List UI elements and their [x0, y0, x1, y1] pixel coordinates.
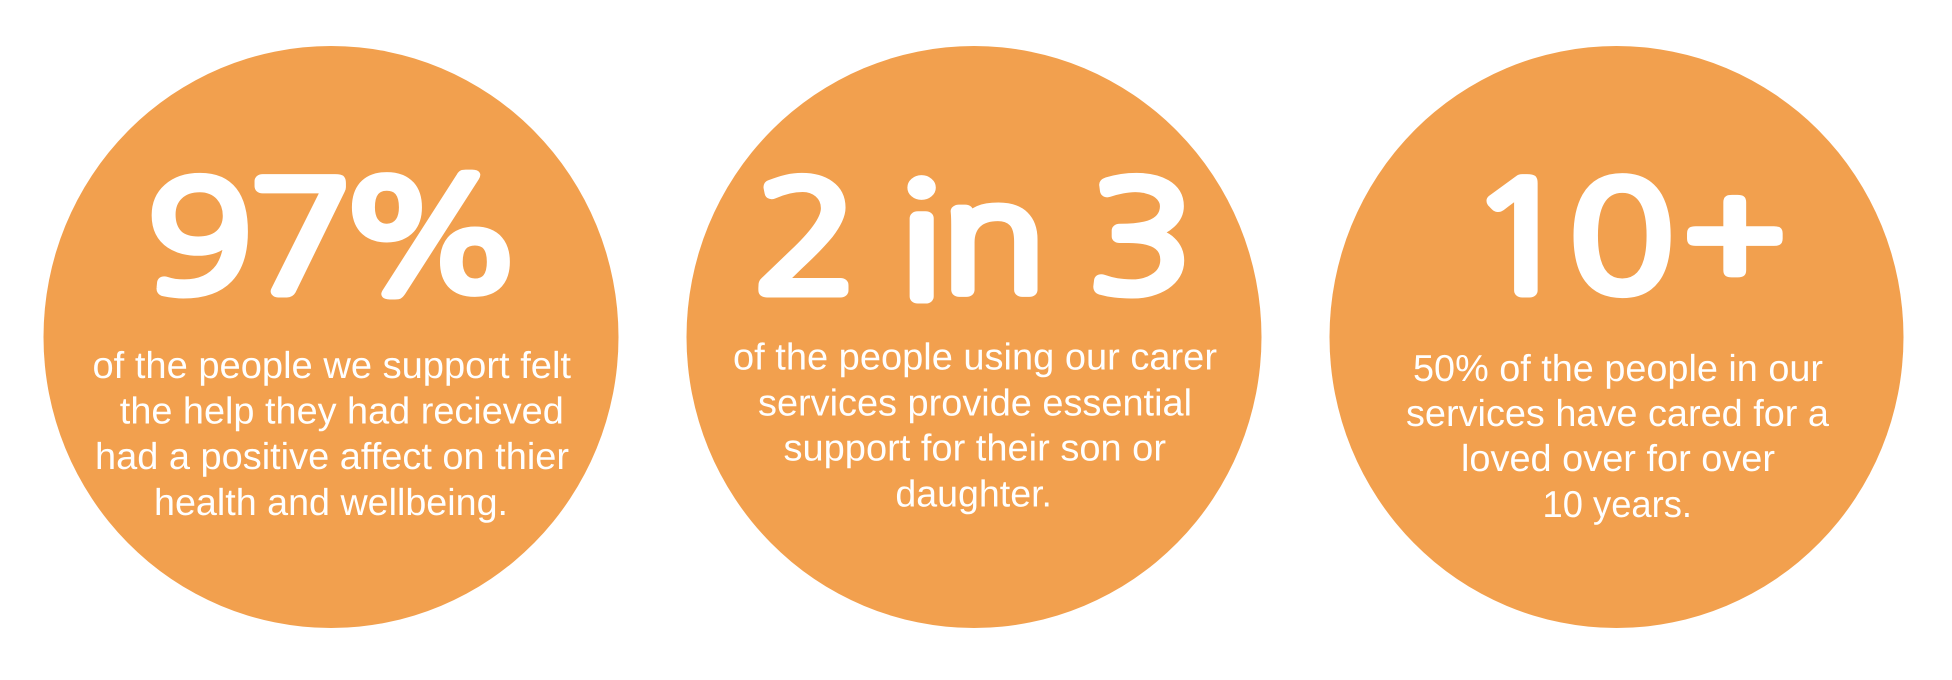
circle background — [44, 46, 618, 628]
description text: services have cared for a — [1406, 392, 1829, 434]
panel: 97% statistic — [44, 46, 618, 628]
description text — [733, 336, 1217, 514]
panel: 2 in 3 statistic — [686, 46, 1262, 628]
description text — [92, 344, 572, 523]
big number: 10+: + — [1684, 171, 1785, 306]
description text: of the people using our carer — [733, 336, 1217, 378]
circle background — [1330, 46, 1904, 628]
description text: 50% of the people in our — [1413, 347, 1823, 389]
description text: services provide essential — [758, 381, 1192, 423]
circle background — [686, 46, 1262, 628]
panel: 10+ statistic — [1330, 46, 1904, 628]
description text — [1406, 347, 1829, 525]
description text: support for their son or — [784, 426, 1166, 468]
description text: the help they had recieved — [120, 390, 564, 432]
big number: 2 in 3: 2 in 3 — [753, 162, 1194, 314]
description text: loved over for over — [1461, 437, 1775, 479]
description text: had a positive affect on thier — [95, 435, 569, 477]
big number: 10+: 10 — [1467, 162, 1675, 314]
description text: daughter. — [895, 472, 1052, 514]
description text: health and wellbeing. — [154, 481, 508, 523]
big number: 97%: 97% — [147, 162, 526, 314]
description text: 10 years. — [1542, 483, 1692, 525]
description text: of the people we support felt — [92, 344, 572, 386]
